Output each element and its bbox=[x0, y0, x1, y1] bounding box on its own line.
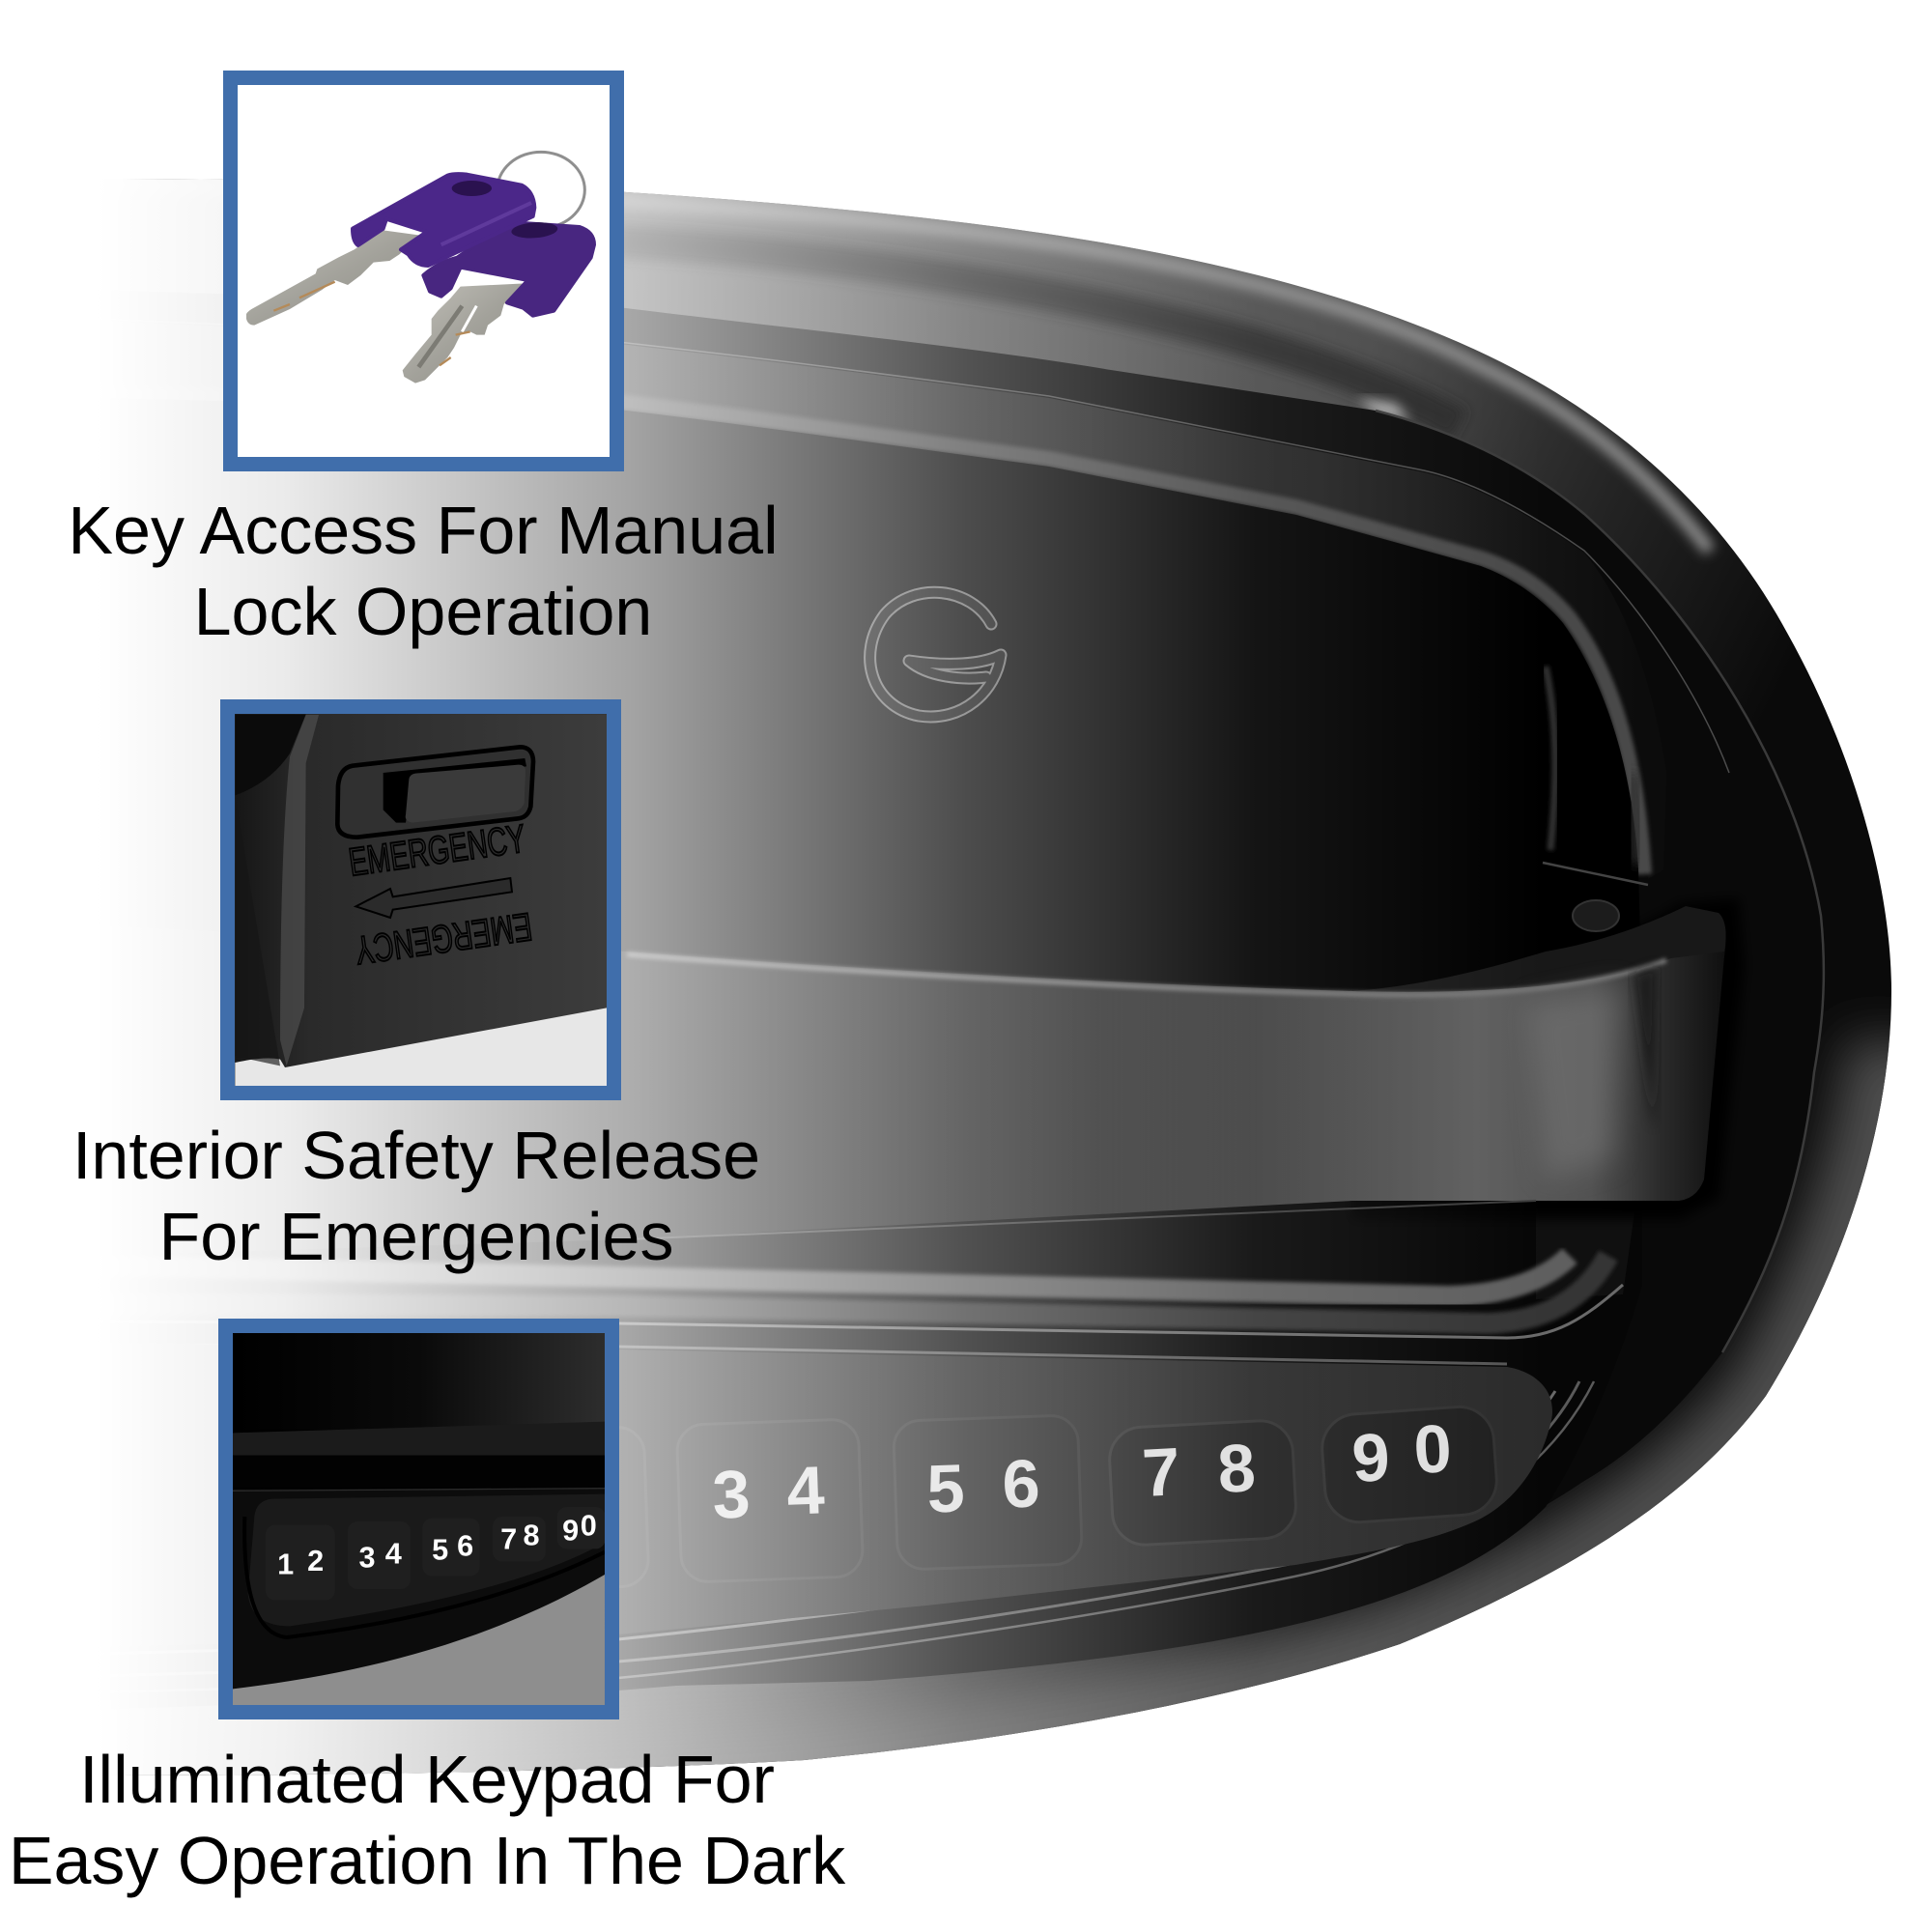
keypad digits bbox=[711, 1410, 1454, 1533]
caption: safety release: Interior Safety Release bbox=[72, 1118, 760, 1193]
caption: safety release bbox=[72, 1118, 760, 1274]
photo: lit keypad: 0 bbox=[581, 1509, 597, 1542]
panel: emergency release inset bbox=[228, 707, 614, 1094]
keypad digits: 5 bbox=[925, 1450, 966, 1527]
photo: lit keypad: 2 bbox=[307, 1545, 324, 1577]
handle bbox=[97, 898, 1745, 1256]
panel: illuminated keypad inset bbox=[226, 1325, 612, 1712]
keypad digits: 7 bbox=[1141, 1434, 1182, 1511]
inner body bounded by rim line bbox=[619, 307, 1810, 1690]
photo: lit keypad: 3 bbox=[358, 1542, 376, 1575]
caption: illuminated keypad: Easy Operation In The Dark bbox=[9, 1823, 846, 1898]
photo: lit keypad: 5 bbox=[432, 1533, 448, 1566]
caption: illuminated keypad bbox=[9, 1742, 846, 1898]
keypad digits: 0 bbox=[1412, 1410, 1454, 1488]
photo: lit keypad: 8 bbox=[523, 1520, 540, 1552]
photo: lit keypad: 6 bbox=[457, 1529, 473, 1562]
caption: key access: Key Access For Manual bbox=[68, 493, 779, 568]
photo: lit keypad: 1 bbox=[277, 1548, 294, 1580]
photo: lit keypad: 4 bbox=[385, 1538, 402, 1571]
photo: lit keypad bbox=[233, 1333, 606, 1705]
dish right wall bbox=[1543, 667, 1648, 885]
photo: emergency slider bbox=[235, 714, 607, 1086]
screw bbox=[1573, 900, 1619, 931]
photo: emergency slider: EMERGENCY bbox=[353, 904, 534, 973]
caption: illuminated keypad: Illuminated Keypad For bbox=[79, 1742, 775, 1817]
caption: safety release: For Emergencies bbox=[159, 1199, 673, 1274]
key 1 2 bbox=[451, 1427, 649, 1592]
keypad digits: 9 bbox=[1350, 1419, 1392, 1496]
caption: key access: Lock Operation bbox=[194, 574, 652, 649]
photo: emergency slider: EMERGENCY bbox=[346, 815, 528, 885]
keypad digits: 4 bbox=[785, 1452, 826, 1529]
outer housing bbox=[97, 179, 1891, 1776]
panel: key access inset bbox=[230, 77, 616, 464]
photo: lit keypad: 9 bbox=[562, 1514, 579, 1547]
key 5 6 bbox=[893, 1415, 1083, 1570]
caption: key access bbox=[68, 493, 779, 649]
white left fade overlay bbox=[97, 179, 1425, 1776]
icon: purple keys bbox=[246, 152, 594, 384]
keypad digits: 8 bbox=[1216, 1430, 1258, 1507]
keypad panel bbox=[97, 1343, 1552, 1647]
key 9 0 bbox=[1320, 1405, 1499, 1524]
key 3 4 bbox=[676, 1419, 864, 1582]
keypad digits: 6 bbox=[1001, 1445, 1041, 1522]
rim sheen and inner body bbox=[97, 184, 1901, 1787]
lower bezel lines bbox=[302, 1248, 1624, 1686]
photo: lit keypad: 7 bbox=[500, 1522, 517, 1555]
G logo bbox=[870, 592, 1001, 717]
keypad digits: 3 bbox=[711, 1456, 752, 1533]
key 7 8 bbox=[1108, 1419, 1297, 1547]
